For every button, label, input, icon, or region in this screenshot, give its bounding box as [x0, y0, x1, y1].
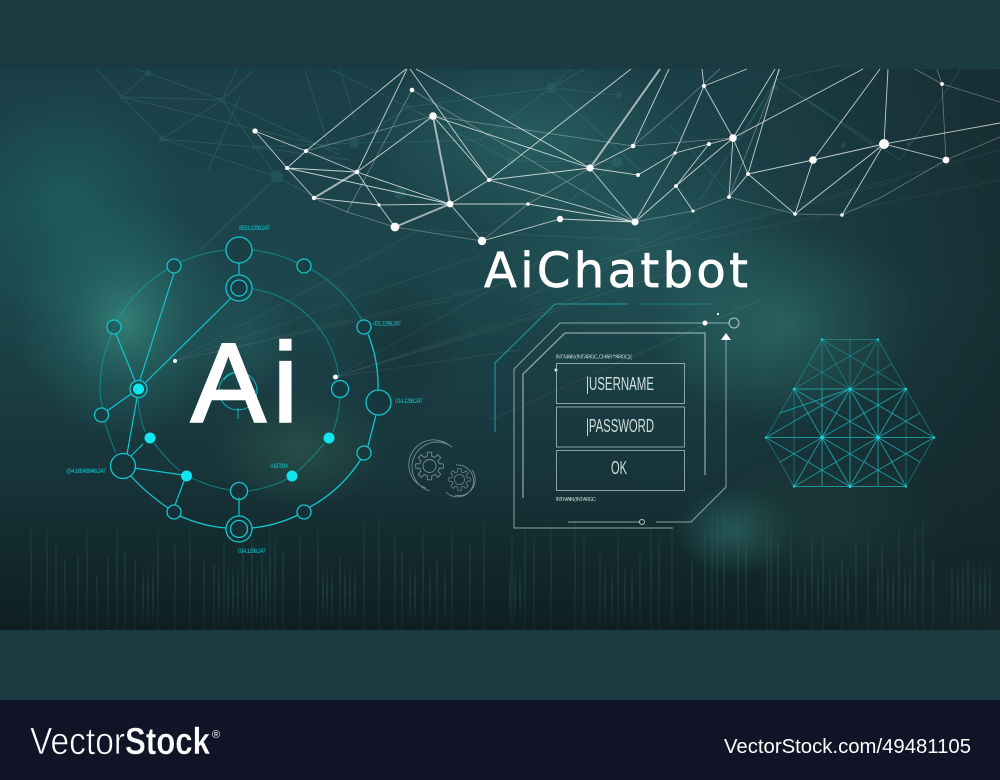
Ai heading: [191, 320, 298, 446]
icon: triangle arrow: [721, 333, 731, 340]
footer logo VectorStock: [30, 721, 220, 763]
hexagon: vertices: [765, 338, 935, 488]
AI network circle diagram: [66, 226, 424, 555]
IP labels: #187934: [270, 464, 289, 470]
icon: gears: [409, 440, 475, 497]
IP labels: 014.1298.247: [395, 399, 424, 405]
equalizer spikes along the bottom: [31, 490, 990, 630]
OK button: OK: [611, 458, 627, 478]
footer logo VectorStock: Vector: [30, 721, 125, 763]
faint background mesh: [96, 65, 960, 250]
outer and inner rings: [100, 250, 378, 528]
IP labels: 431.1298.247: [373, 322, 402, 328]
AiChatbot title: AiChatbot: [484, 243, 748, 299]
polygon network mesh (white): [252, 69, 1000, 245]
username input box: |USERNAME: [586, 374, 654, 394]
password input box: |PASSWORD: [586, 416, 654, 436]
mesh: nodes: [252, 82, 949, 245]
footer logo VectorStock: Stock: [125, 721, 211, 763]
OK button: [556, 450, 684, 490]
mesh: thick edges: [314, 69, 660, 227]
circuit frame lines: [514, 323, 730, 528]
big gear: [416, 452, 443, 480]
code caption top: INT MAIN ( INT ARGC, CHAR **ARGC) {: [556, 354, 632, 360]
teal corner lines: [495, 304, 710, 432]
faint light rays: [175, 150, 1000, 420]
ring nodes: [94, 237, 391, 542]
frame dots: [554, 313, 719, 372]
small white dots: [173, 359, 338, 380]
login panel frame: [495, 304, 739, 528]
small gear: [449, 469, 470, 490]
IP labels: [66, 226, 424, 555]
code caption bottom: INT MAIN ( INT ARGC: [556, 497, 596, 503]
centre reticle: [219, 372, 257, 419]
hexagon wireframe: [765, 338, 935, 488]
username input box: [556, 364, 684, 404]
Ai heading: A: [191, 320, 266, 446]
IP labels: 8531.1298.247: [239, 226, 271, 232]
hexagon: lower bright part: [766, 389, 934, 486]
footer image id: VectorStock.com/49481105: [724, 736, 971, 758]
IP labels: 014.1298.247: [238, 549, 267, 555]
footer logo VectorStock: ®: [212, 729, 220, 741]
solid cyan nodes: [133, 384, 334, 482]
connector lines: [107, 263, 239, 516]
glowing gradient background panel: [0, 50, 1000, 630]
mesh: strong edges: [255, 69, 1000, 241]
password input box: [556, 407, 684, 447]
Ai heading: i: [273, 320, 298, 446]
small circle ends: [640, 318, 739, 524]
IP labels: @4.1654894I6.247: [66, 469, 107, 475]
hexagon: upper faded part: [766, 340, 934, 486]
footer bar background: [0, 700, 1000, 780]
mesh: faded edges: [306, 69, 1000, 241]
